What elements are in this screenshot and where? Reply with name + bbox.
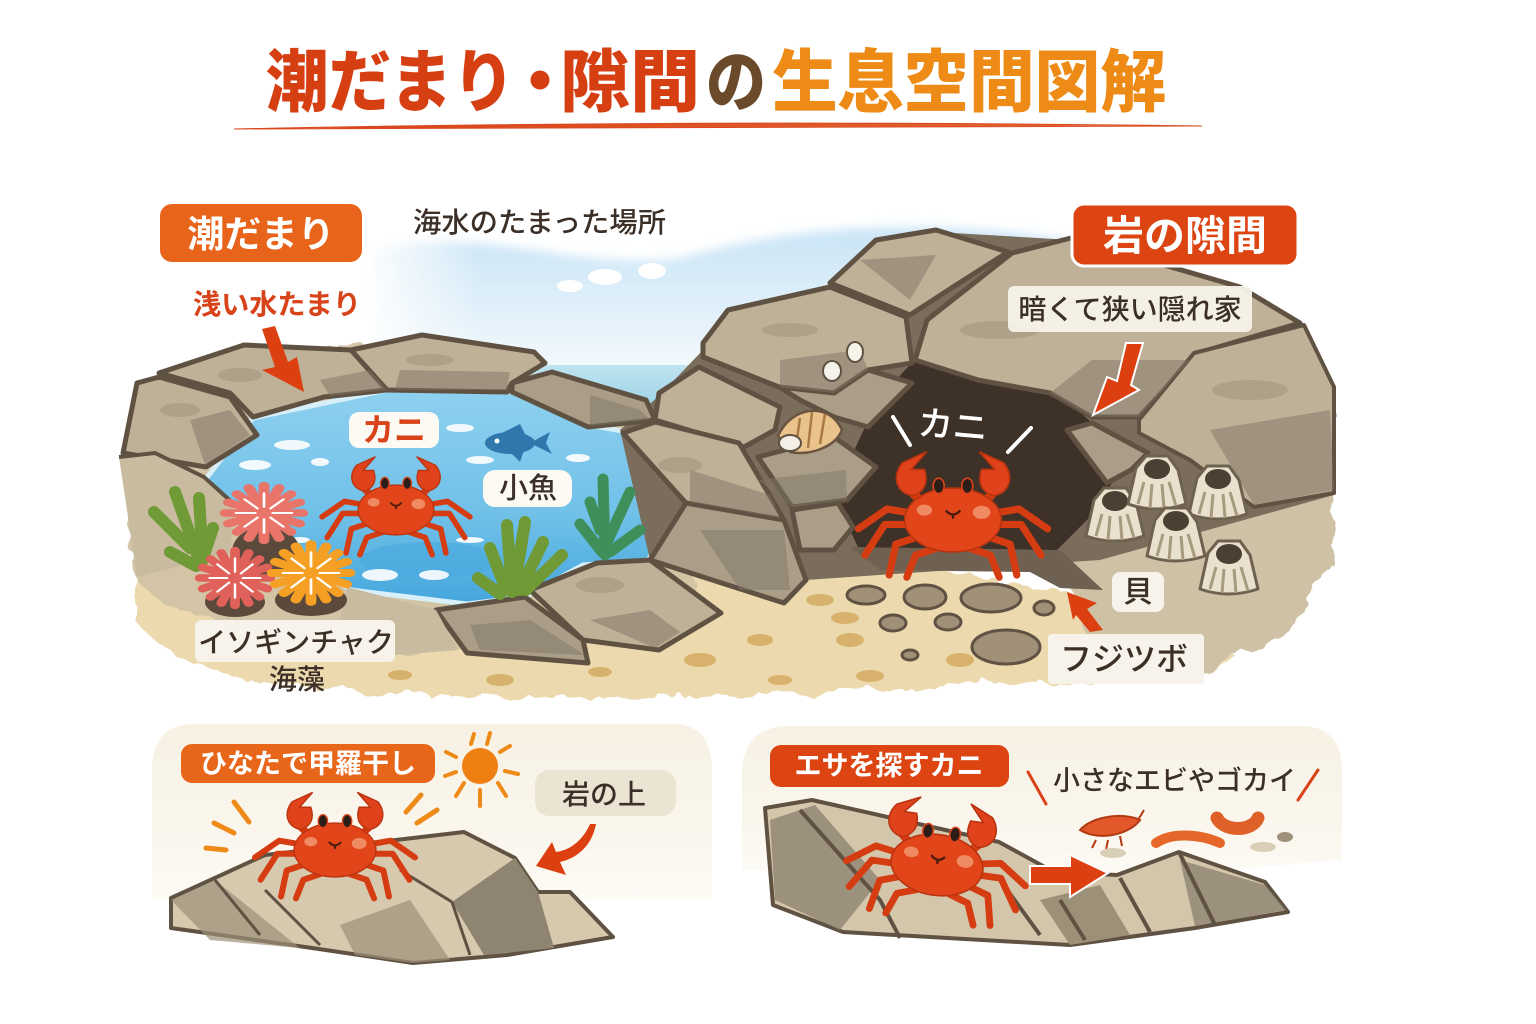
arrow: to prey [1030, 855, 1108, 897]
panel heading: foraging: エサを探すカニ [794, 751, 984, 781]
label: anemone and seaweed: イソギンチャク [198, 627, 394, 658]
label: crab in pool: カニ [362, 412, 426, 448]
label: crevice heading [1072, 204, 1298, 266]
barnacles [1086, 456, 1258, 594]
title: 隙間 [560, 45, 700, 121]
label: small fish: 小魚 [499, 472, 557, 505]
label: tide pool heading [160, 204, 362, 262]
label: tide pool heading: 潮だまり [187, 214, 335, 255]
label: crevice heading: 岩の隙間 [1103, 213, 1267, 259]
panel: sunbathing [152, 724, 712, 963]
facets [1050, 360, 1190, 417]
crab foraging [840, 788, 1035, 932]
crab sunbathing [255, 792, 415, 898]
cave floor [850, 547, 1103, 590]
panel heading: sunbathing: ひなたで甲羅干し [200, 749, 416, 779]
panel heading: sunbathing [181, 744, 435, 783]
label: prey [1028, 766, 1318, 804]
fish [485, 424, 552, 462]
title: 生息空間図解 [772, 45, 1166, 121]
cave crab label [893, 404, 1031, 452]
label: prey: 小さなエビやゴカイ [1053, 766, 1296, 796]
label: barnacle [1048, 634, 1204, 684]
sandy ground [125, 330, 1335, 698]
arrow: to cave [1093, 343, 1143, 415]
label: on the rock: 岩の上 [562, 779, 646, 810]
label: anemone and seaweed [195, 620, 395, 695]
shells [778, 342, 863, 453]
label: dark narrow hiding place: 暗くて狭い隠れ家 [1018, 294, 1242, 325]
rock [765, 800, 1288, 945]
label: seawater place: 海水のたまった場所 [413, 207, 666, 238]
rocks around the pool [119, 335, 806, 663]
icon: worm 2 [1217, 818, 1258, 828]
anemones [200, 486, 350, 617]
title: ・ [506, 45, 574, 121]
label: small fish [483, 470, 572, 507]
title: の [706, 45, 766, 121]
title [234, 45, 1202, 129]
label: shell: 貝 [1123, 576, 1153, 609]
seaweed [154, 479, 640, 594]
icon: worm [1156, 835, 1220, 843]
cave [838, 360, 1112, 553]
label: shell [1112, 572, 1164, 612]
cave crab label: カニ [916, 404, 989, 449]
label: on the rock [535, 770, 676, 816]
rock backing [620, 232, 1334, 580]
title: 潮だまり [266, 45, 515, 121]
rock [171, 832, 613, 963]
arrow: to pool [262, 326, 304, 392]
pool: tide pool water [205, 390, 684, 604]
label: dark narrow hiding place [1008, 286, 1252, 332]
icon: sun [445, 733, 518, 806]
panel heading: foraging [770, 745, 1009, 787]
crab in pool [322, 457, 470, 555]
arrow: to rock [536, 824, 596, 875]
rays [206, 795, 437, 850]
crab in cave [858, 452, 1048, 577]
panel: foraging [742, 726, 1342, 945]
icon: shrimp [1080, 810, 1144, 850]
arrow: to barnacle area [1067, 592, 1103, 632]
pebbles on sand [847, 584, 1054, 664]
label: anemone and seaweed: 海藻 [269, 664, 325, 695]
facets [320, 370, 387, 396]
label: barnacle: フジツボ [1060, 641, 1188, 677]
label: shallow puddle: 浅い水たまり [193, 289, 361, 320]
rocks: crevice surround [703, 230, 1334, 550]
sky and sea [360, 215, 1070, 415]
